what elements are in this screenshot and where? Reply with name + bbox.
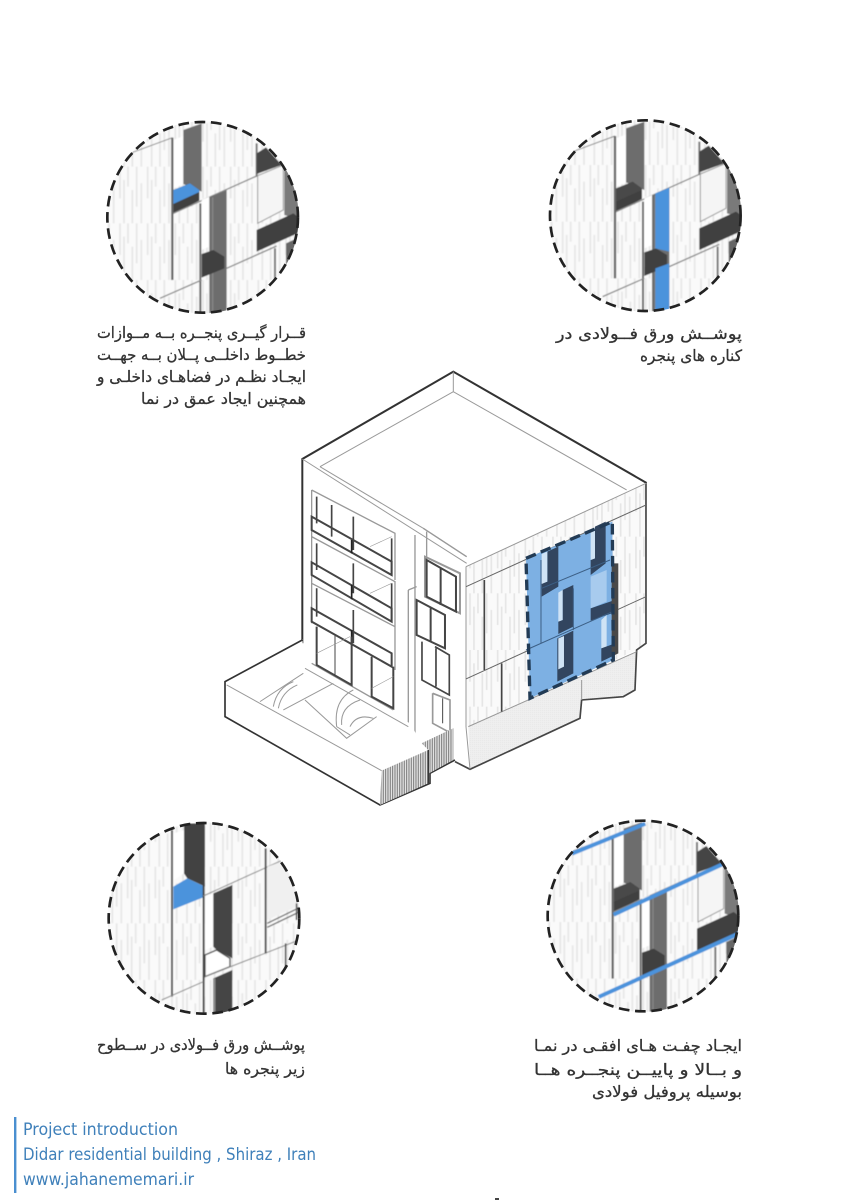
panel: detail circle steel sheet under windows [107,822,301,1015]
page mark [495,1198,499,1200]
caption: steel sheet under windows: زیر پنجره ها [225,1060,305,1079]
image: facade detail with blue horizontal profiles [546,819,740,1013]
dashed selection outline [526,522,613,698]
dashed ring [107,122,298,313]
caption: horizontal joints: بوسیله پروفیل فولادی [592,1083,742,1102]
corrugated gate [380,750,428,805]
caption: horizontal joints: و بــالا و پاییــن پنجــره هــا [534,1061,742,1080]
caption: steel sheet under windows [97,1036,305,1079]
image: facade detail with blue under-window surface [108,822,300,1014]
caption: window alignment: همچنین ایجاد عمق در نما [141,390,306,408]
caption: window alignment: خطــوط داخلــی پــلان بــه جهــت [97,346,306,365]
courtyard [225,639,455,805]
dashed ring [548,821,738,1011]
panel: detail circle horizontal joints [546,819,740,1013]
side bay [408,528,467,743]
dashed ring [550,120,741,311]
image: facade detail with blue window side [548,119,742,312]
caption: horizontal joints: ایجـاد چفـت هـای افقـی در نمـا [534,1037,742,1055]
brick base [468,652,637,768]
caption: horizontal joints [534,1037,742,1102]
footer project credit: www.jahanememari.ir [23,1170,194,1190]
caption: steel sheet at window sides [555,325,743,366]
caption: steel sheet at window sides: پوشــش ورق فــولادی در [555,325,742,344]
footer project credit [14,1117,316,1193]
dashed ring [109,823,299,1014]
highlighted blue area [526,522,618,698]
footer project credit: Didar residential building , Shiraz , Iran [23,1145,316,1165]
caption: steel sheet under windows: پوشــش ورق فــولادی در ســطوح [97,1036,305,1055]
caption: window alignment: قــرار گیــری پنجــره بــه مــوازات [97,324,306,343]
caption: steel sheet at window sides: کناره های پنجره [640,347,743,366]
isometric building drawing [225,372,647,805]
panel: detail circle window alignment [106,120,300,314]
left facade and roof [225,372,647,805]
image: facade detail with blue window sill [108,122,299,314]
footer project credit: Project introduction [23,1120,178,1140]
window frames upper [312,490,395,710]
right facade cladding [455,483,646,769]
panel: detail circle steel sheet at window sides [548,119,742,312]
caption: window alignment: ایجـاد نظـم در فضاهـای داخلـی و [96,368,306,387]
caption: window alignment [96,324,306,408]
